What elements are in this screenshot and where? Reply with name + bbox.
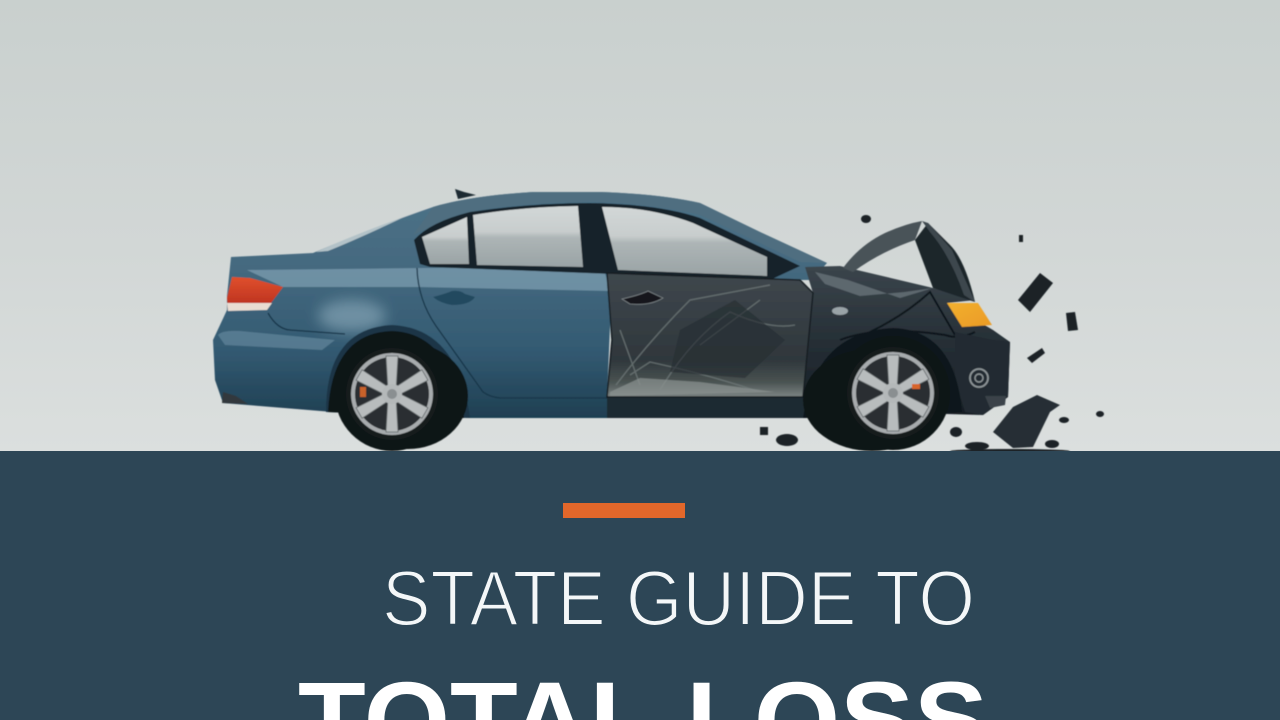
rear exhaust valance bbox=[222, 392, 248, 404]
rear door handle bbox=[433, 291, 475, 305]
heading line 1: STATE GUIDE TO bbox=[382, 554, 975, 642]
window frame bbox=[414, 203, 800, 280]
rear door window bbox=[473, 206, 583, 267]
illustration: crashed car bbox=[213, 189, 1104, 453]
background bbox=[0, 0, 1280, 452]
rear and mid body in blue bbox=[213, 192, 827, 418]
roof edge shading bbox=[413, 192, 827, 263]
dark title panel bbox=[0, 451, 1280, 720]
side mirror indicator bbox=[832, 307, 848, 315]
tail light bbox=[227, 277, 283, 311]
damaged front door bbox=[607, 273, 813, 397]
rear windscreen strip bbox=[316, 207, 432, 252]
open hood bbox=[843, 221, 975, 302]
rear bumper highlight bbox=[218, 331, 335, 350]
fender highlight bbox=[318, 300, 386, 332]
fender crease highlight bbox=[815, 272, 933, 298]
antenna bbox=[455, 189, 476, 199]
rear wheel arch bbox=[326, 325, 470, 418]
rear wheel bbox=[335, 337, 468, 451]
orange accent bar bbox=[563, 503, 685, 518]
crumpled fender lines bbox=[840, 292, 975, 340]
bumper bbox=[955, 332, 1010, 415]
headlight bbox=[947, 303, 992, 327]
front door window bbox=[602, 207, 767, 276]
front section in dark grey bbox=[770, 266, 1010, 418]
front wheel arch bbox=[803, 328, 962, 418]
lower sill in dark bbox=[607, 397, 812, 418]
rear quarter window bbox=[422, 217, 469, 264]
debris bbox=[760, 215, 1104, 453]
rear wheel arch inner bbox=[328, 331, 464, 418]
rear door seam bbox=[268, 268, 607, 398]
shoulder highlight bbox=[247, 266, 610, 291]
front wheel bbox=[803, 336, 950, 451]
front door handle bbox=[622, 291, 663, 304]
